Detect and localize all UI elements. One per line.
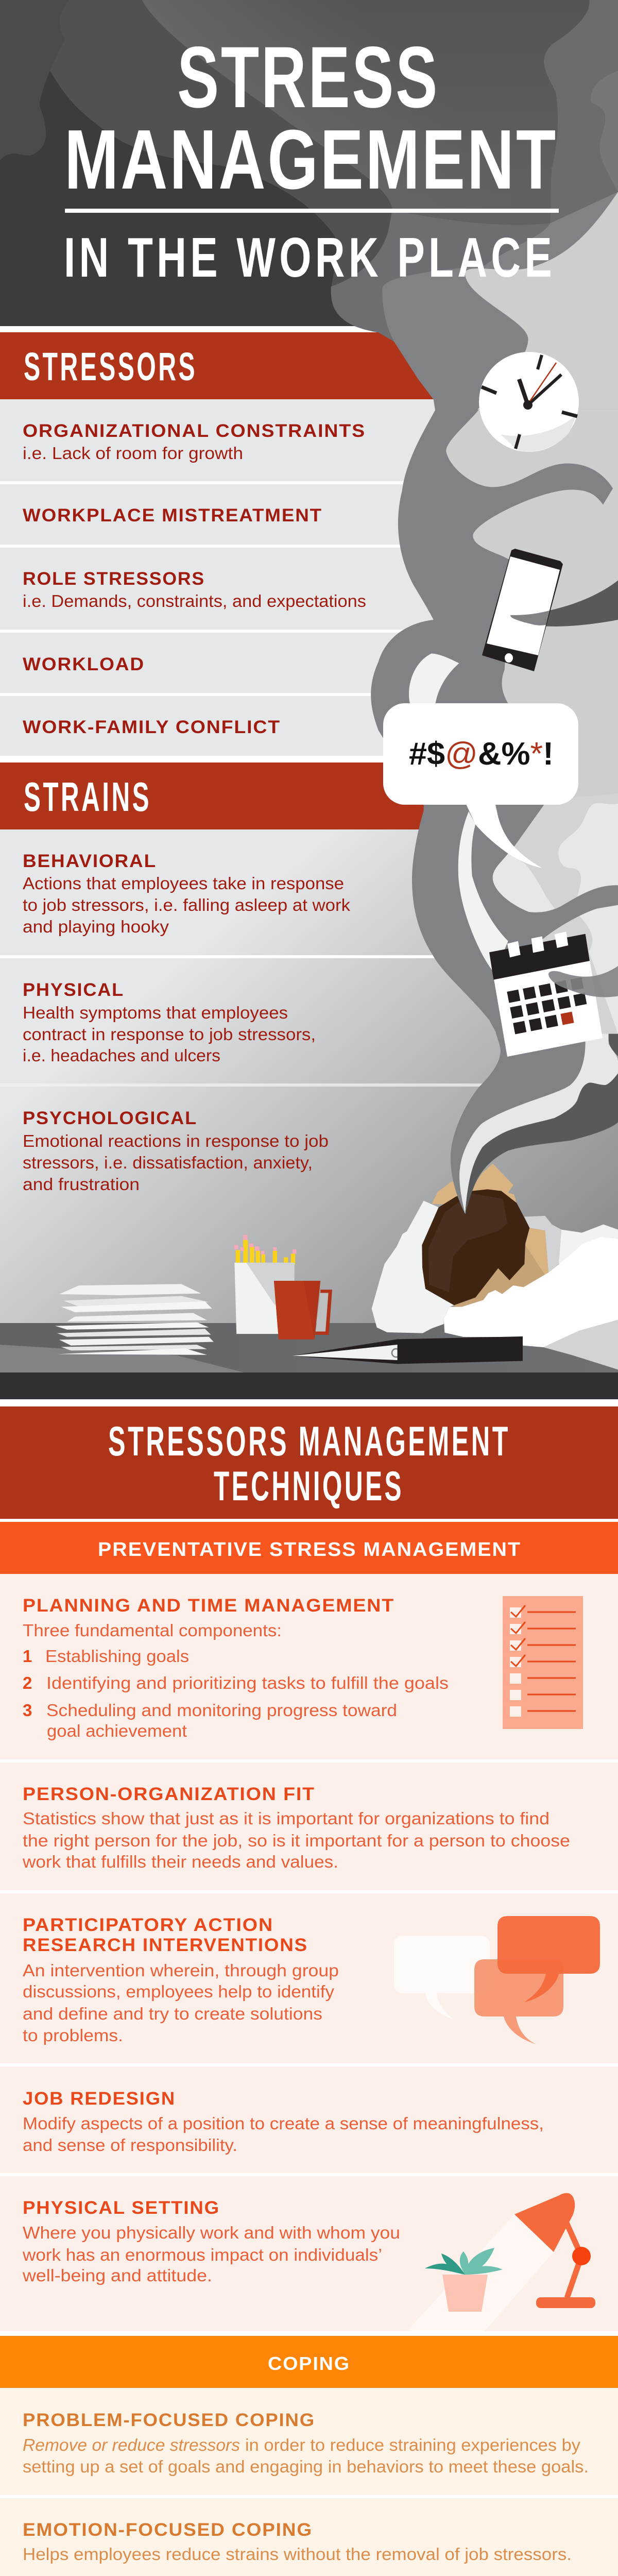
title [64, 28, 559, 289]
section heading: preventative: PREVENTATIVE STRESS MANAGEMENT [98, 1539, 521, 1561]
text: psychological [23, 1131, 329, 1194]
list: components: 3 [23, 1701, 32, 1720]
icon: speech bubbles [394, 1916, 600, 2044]
item: person-organization fit: PERSON-ORGANIZATION FIT [23, 1784, 315, 1804]
smoke, middle grey body [371, 410, 618, 824]
panel: preventative stress management [0, 1522, 618, 2331]
text: problem-focused coping [23, 2435, 589, 2476]
text: physical setting: Where you physically work and with whom you [23, 2223, 400, 2242]
item: participatory action research interventions: PARTICIPATORY ACTION [23, 1915, 273, 1935]
panel: techniques heading [0, 1406, 618, 1519]
item: emotion-focused coping: EMOTION-FOCUSED COPING [23, 2520, 313, 2540]
text: participatory action: and define and try to create solutions [23, 2004, 322, 2023]
text: person-organization fit: Statistics show that just as it is important for organizations to find [23, 1809, 550, 1828]
text: person-organization fit: the right person for the job, so is it important for a person to choose [23, 1831, 570, 1850]
item: physical: PHYSICAL [23, 980, 124, 1000]
text: physical setting: work has an enormous impact on individuals’ [22, 2245, 382, 2264]
hair [422, 1189, 529, 1305]
illustration: stack of papers [55, 1284, 214, 1355]
heading: stressors: STRESSORS [24, 345, 197, 389]
smoke, lower header layers [331, 192, 618, 412]
icon: smartphone [482, 549, 563, 671]
panel: strains [23, 774, 351, 1194]
item: behavioral: BEHAVIORAL [23, 851, 157, 871]
item: job redesign: JOB REDESIGN [23, 2089, 176, 2109]
band backgrounds: stressors and strains rows [0, 326, 618, 1323]
item: organizational constraints: ORGANIZATIONAL CONSTRAINTS [23, 421, 366, 441]
item: workload: WORKLOAD [23, 654, 145, 674]
text: job redesign [23, 2114, 544, 2155]
item: planning and time management: PLANNING AND TIME MANAGEMENT [23, 1596, 394, 1616]
list: components: 2 [23, 1673, 32, 1692]
text: problem-focused coping: setting up a set of goals and engaging in behaviors to meet these goals. [23, 2457, 589, 2476]
text: behavioral [23, 874, 351, 936]
item: participatory action research interventions [23, 1915, 308, 1955]
icon: desk lamp and plant [407, 2193, 595, 2331]
text: physical setting: well-being and attitude. [22, 2266, 212, 2285]
panel: coping [0, 2336, 618, 2576]
item: work-family conflict: WORK-FAMILY CONFLICT [23, 717, 281, 737]
hands on head [432, 1163, 517, 1206]
text: behavioral: to job stressors, i.e. falling asleep at work [23, 895, 351, 914]
text: job redesign: and sense of responsibility. [23, 2136, 237, 2155]
list: components: 1 [23, 1647, 32, 1666]
text: problem-focused coping: Remove or reduce stressors [23, 2435, 240, 2454]
note: role stressors: i.e. Demands, constraints, and expectations [23, 591, 366, 611]
icon: calendar [489, 931, 618, 1057]
text: participatory action: discussions, employees help to identify [23, 1982, 335, 2001]
list: components: Establishing goals [45, 1647, 189, 1666]
text: participatory action: An intervention wherein, through group [23, 1961, 339, 1980]
icon: clock [479, 352, 579, 452]
illustration: pencil cup and mug [234, 1235, 330, 1340]
text: psychological: stressors, i.e. dissatisfaction, anxiety, [23, 1153, 313, 1172]
smoke, lower ribbons to head [451, 1030, 618, 1214]
item: physical setting: PHYSICAL SETTING [23, 2198, 220, 2218]
illustration: man slumped on desk [292, 1163, 618, 1369]
arm [444, 1237, 618, 1347]
binder [292, 1336, 523, 1364]
text: physical: i.e. headaches and ulcers [23, 1046, 220, 1065]
text: participatory action: to problems. [23, 2026, 123, 2045]
symbols text: #$@&%*! [409, 736, 554, 772]
item: psychological: PSYCHOLOGICAL [23, 1108, 197, 1128]
heading line 2: TECHNIQUES [214, 1463, 404, 1510]
speech bubble with symbols [383, 703, 578, 868]
list: components: Three fundamental components: [23, 1621, 282, 1640]
section heading: coping: COPING [268, 2353, 350, 2374]
smoke, around calendar [412, 793, 618, 1034]
list: components [23, 1621, 449, 1740]
header smoke background [0, 0, 618, 342]
sleeve left arm [372, 1201, 454, 1333]
text: participatory action [23, 1961, 339, 2045]
heading: strains: STRAINS [24, 774, 151, 820]
text: person-organization fit [22, 1809, 570, 1871]
item: workplace mistreatment: WORKPLACE MISTREATMENT [23, 505, 322, 526]
text: psychological: Emotional reactions in response to job [23, 1131, 329, 1150]
text: physical: contract in response to job stressors, [23, 1025, 316, 1044]
illustration: desk [0, 1323, 618, 1399]
text: physical: Health symptoms that employees [23, 1003, 288, 1022]
list: components: Scheduling and monitoring progress toward [46, 1701, 397, 1720]
icon: checklist [503, 1596, 583, 1729]
text: behavioral: and playing hooky [23, 917, 169, 936]
list: components: Identifying and prioritizing tasks to fulfill the goals [46, 1673, 449, 1692]
text: job redesign: Modify aspects of a position to create a sense of meaningfulness, [23, 2114, 544, 2133]
item: problem-focused coping: PROBLEM-FOCUSED COPING [23, 2410, 315, 2430]
text: psychological: and frustration [23, 1175, 140, 1194]
text: behavioral: Actions that employees take in response [23, 874, 344, 893]
title line 1: STRESS [177, 28, 439, 126]
text: person-organization fit: work that fulfills their needs and values. [22, 1852, 338, 1871]
text: physical [23, 1003, 316, 1065]
text: physical setting [22, 2223, 400, 2285]
list: components: goal achievement [47, 1721, 187, 1740]
item: role stressors: ROLE STRESSORS [23, 569, 205, 589]
text: emotion-focused coping: Helps employees reduce strains without the removal of job stressors. [23, 2545, 572, 2564]
note: organizational constraints: i.e. Lack of room for growth [23, 444, 243, 463]
item: participatory action research interventions: RESEARCH INTERVENTIONS [23, 1935, 308, 1955]
text: problem-focused coping: in order to reduce straining experiences by [245, 2435, 581, 2454]
panel: stressors [23, 345, 366, 737]
